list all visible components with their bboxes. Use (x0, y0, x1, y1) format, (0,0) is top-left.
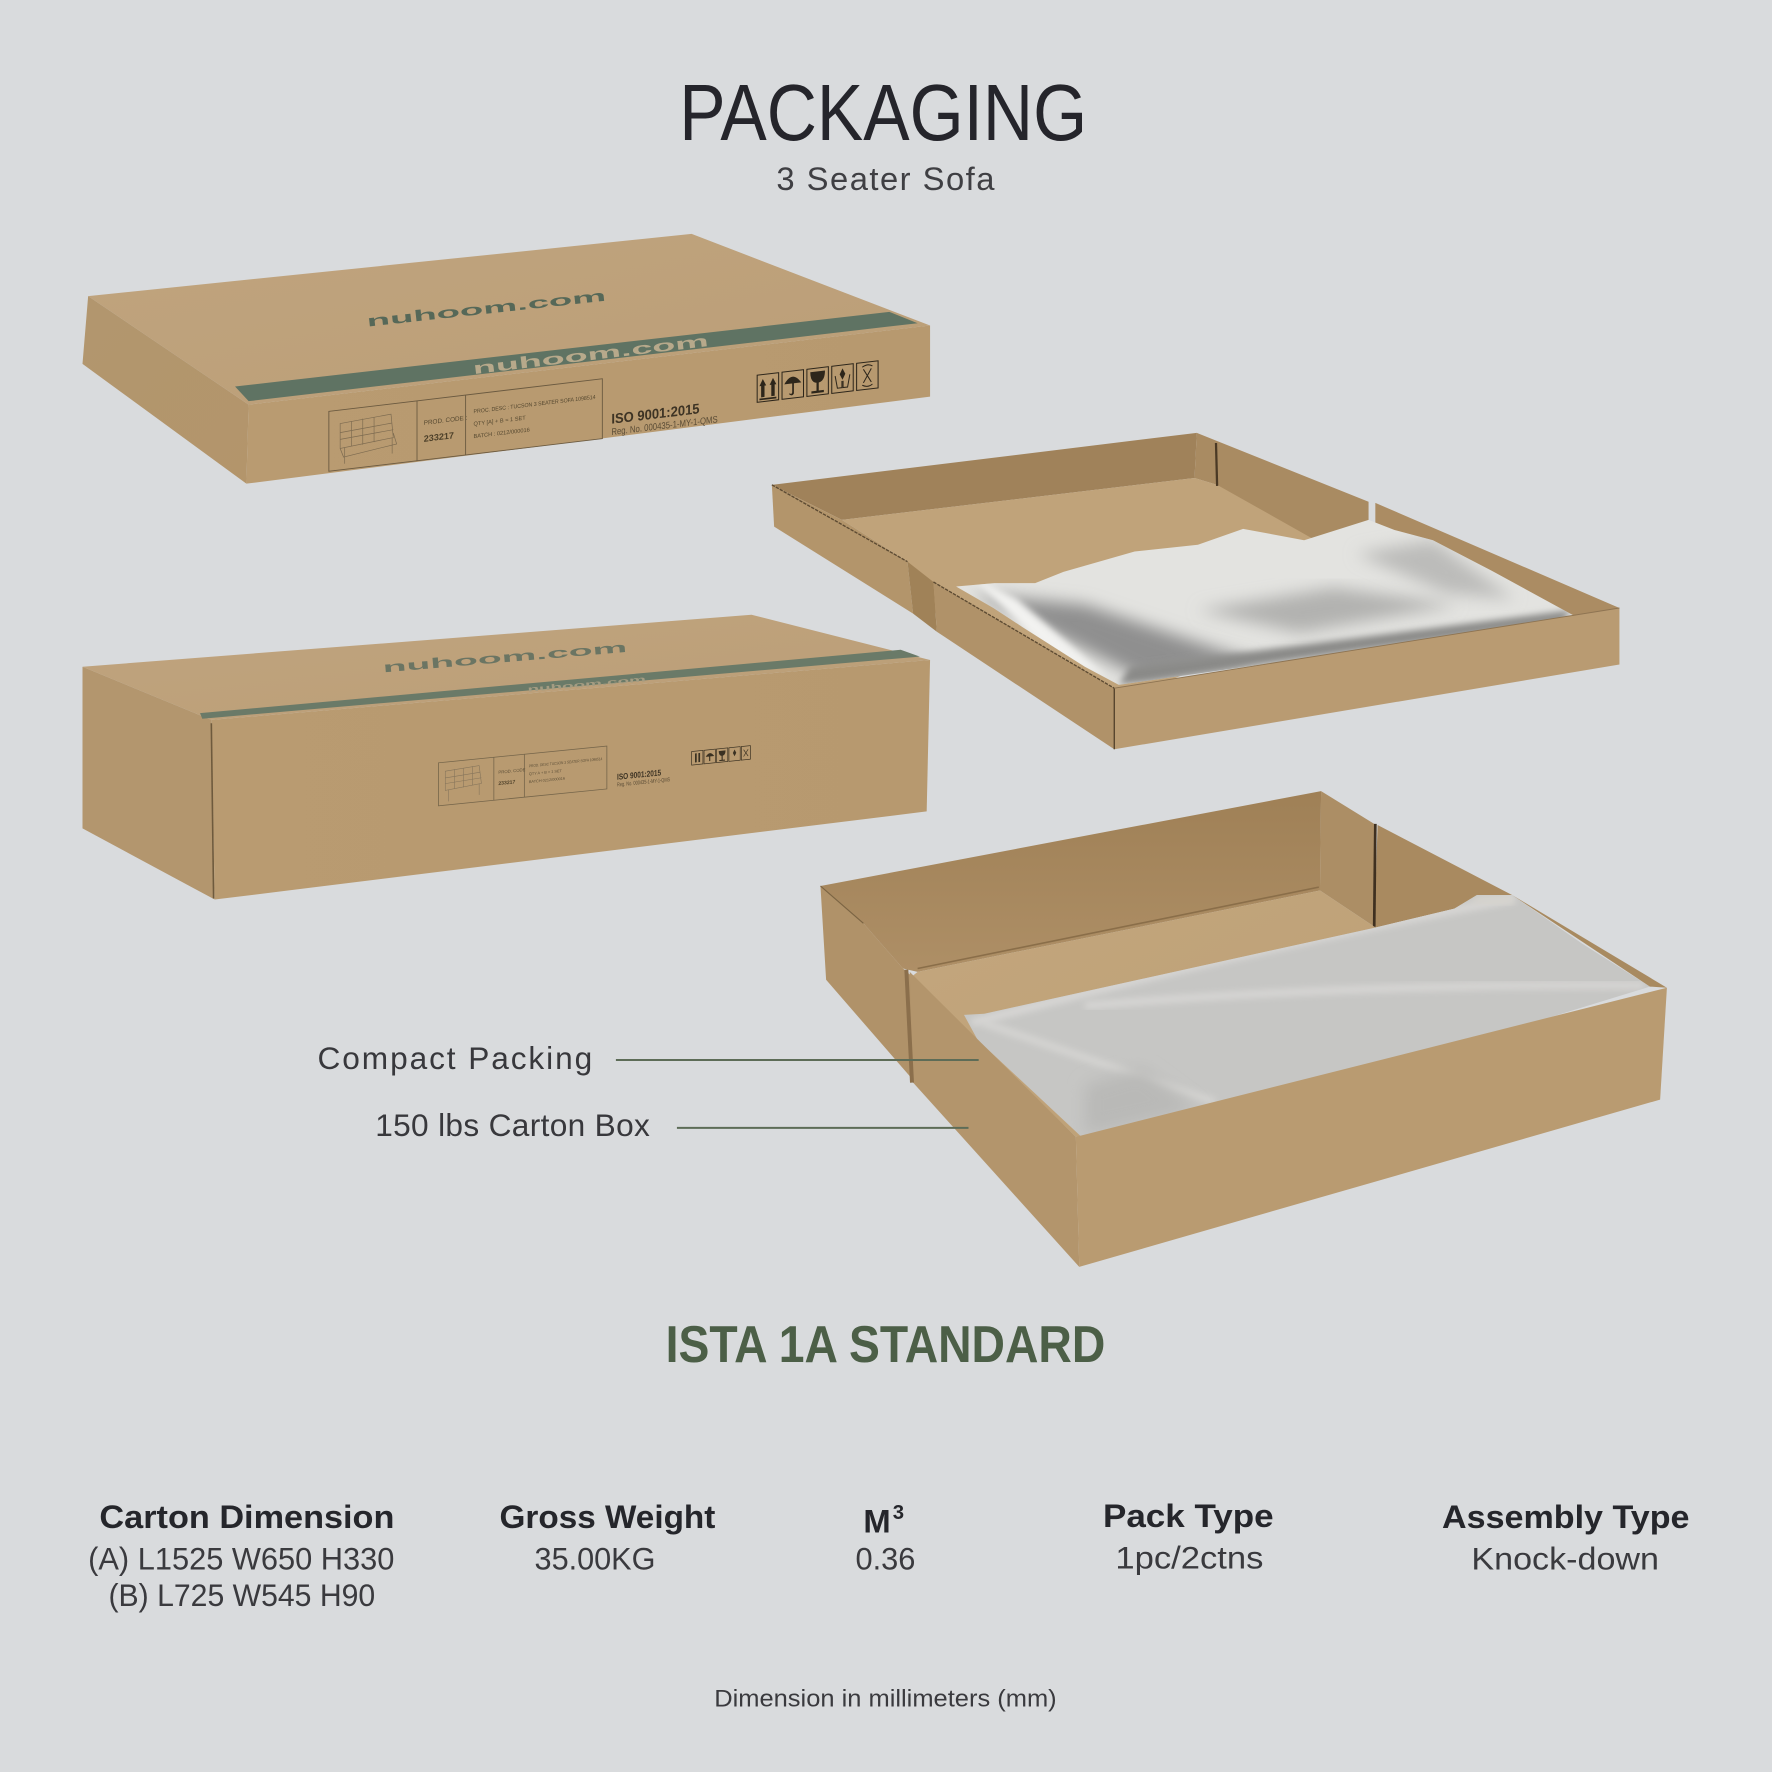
spec: carton dimension: Carton Dimension (99, 1498, 394, 1535)
spec: assembly type (1442, 1498, 1690, 1577)
spec: gross weight: Gross Weight (500, 1498, 715, 1535)
green tape strip (200, 650, 920, 719)
title: PACKAGING (679, 68, 1087, 158)
carton top face (82, 615, 930, 720)
product label: BATCH 0212/000016 (529, 777, 565, 784)
ISO mark (611, 399, 718, 438)
spec: pack type: Pack Type (1103, 1497, 1274, 1534)
front-left wall (910, 972, 1079, 1267)
carton floor (912, 891, 1374, 1137)
closed tall carton (82, 615, 930, 900)
product label: 233217 (498, 779, 515, 787)
ISO mark: ISO 9001:2015 (617, 767, 661, 782)
product label: PROD. CODE : (424, 415, 468, 427)
callout: carton box: 150 lbs Carton Box (375, 1107, 650, 1143)
carton left face (82, 296, 249, 484)
logo on tape: nuhoom.com (472, 332, 710, 378)
right wall interior (1320, 791, 1374, 927)
spec: cubic metres: 0.36 (855, 1541, 915, 1577)
product label: QTY A + B = 1 SET (529, 769, 563, 776)
product label: BATCH : 0212/000016 (474, 427, 530, 440)
product label (438, 746, 607, 806)
open flat carton with wrapped contents (772, 433, 1619, 749)
subtitle: 3 Seater Sofa (776, 160, 995, 197)
ISO mark: Reg. No. 000435-1-MY-1-QMS (611, 414, 718, 438)
wrapped contents (964, 895, 1650, 1136)
product label: QTY [A] + B = 1 SET (474, 415, 526, 428)
ISO mark (617, 766, 670, 789)
box seam (211, 723, 214, 898)
logo on top face: nuhoom.com (366, 286, 607, 330)
footnote: Dimension in millimeters (mm) (714, 1686, 1057, 1712)
ISO mark: Reg. No. 000435-1-MY-1-QMS (617, 777, 670, 789)
carton left face (82, 667, 215, 900)
callout: compact packing: Compact Packing (318, 1040, 592, 1076)
back wall interior (820, 791, 1321, 972)
left wall outer (772, 485, 913, 614)
spec: carton dimension: (A) L1525 W650 H330 (88, 1541, 394, 1577)
front-left wall (933, 582, 1114, 749)
handling icons (692, 746, 750, 765)
carton front face (246, 325, 930, 484)
product label: PROD. CODE (498, 767, 526, 775)
spec: pack type: 1pc/2ctns (1115, 1540, 1263, 1576)
carton floor (842, 478, 1315, 701)
front wall (1076, 988, 1667, 1267)
handling icons (757, 361, 878, 402)
wrapped contents (956, 520, 1573, 685)
closed flat carton (82, 234, 930, 484)
corner seam (906, 970, 912, 1083)
green tape strip (235, 312, 918, 401)
front wall (1114, 608, 1619, 749)
logo on tape: nuhoom.com (527, 675, 647, 694)
open tall carton with wrapped contents (820, 791, 1673, 1267)
carton top face (88, 234, 930, 405)
carton front face (211, 660, 930, 900)
standard heading: ISTA 1A STANDARD (666, 1316, 1105, 1374)
spec: gross weight: 35.00KG (535, 1541, 655, 1577)
right wall interior (1195, 433, 1369, 554)
logo on top face: nuhoom.com (382, 640, 628, 676)
spec: cubic metres (855, 1502, 915, 1577)
spec: carton dimension: (B) L725 W545 H90 (108, 1577, 375, 1613)
product label: PROC. DESC : TUCSON 3 SEATER SOFA 1098514 (474, 395, 596, 415)
product label (329, 379, 602, 471)
spec: pack type (1103, 1497, 1274, 1576)
spec: carton dimension (88, 1498, 394, 1613)
right rim (1512, 895, 1667, 988)
spec: assembly type: Knock-down (1471, 1541, 1659, 1577)
spec: gross weight (500, 1498, 715, 1577)
product label: PROD. DESC TUCSON 3 SEATER SOFA 1098514 (529, 757, 603, 768)
back wall crease (918, 887, 1319, 968)
spec: cubic metres: M (863, 1502, 891, 1539)
left wall outer (820, 886, 915, 1083)
product label: 233217 (424, 430, 454, 444)
spec: cubic metres: 3 (893, 1502, 904, 1524)
spec: assembly type: Assembly Type (1442, 1498, 1690, 1535)
ISO mark: ISO 9001:2015 (611, 401, 700, 428)
back wall interior (772, 433, 1197, 520)
